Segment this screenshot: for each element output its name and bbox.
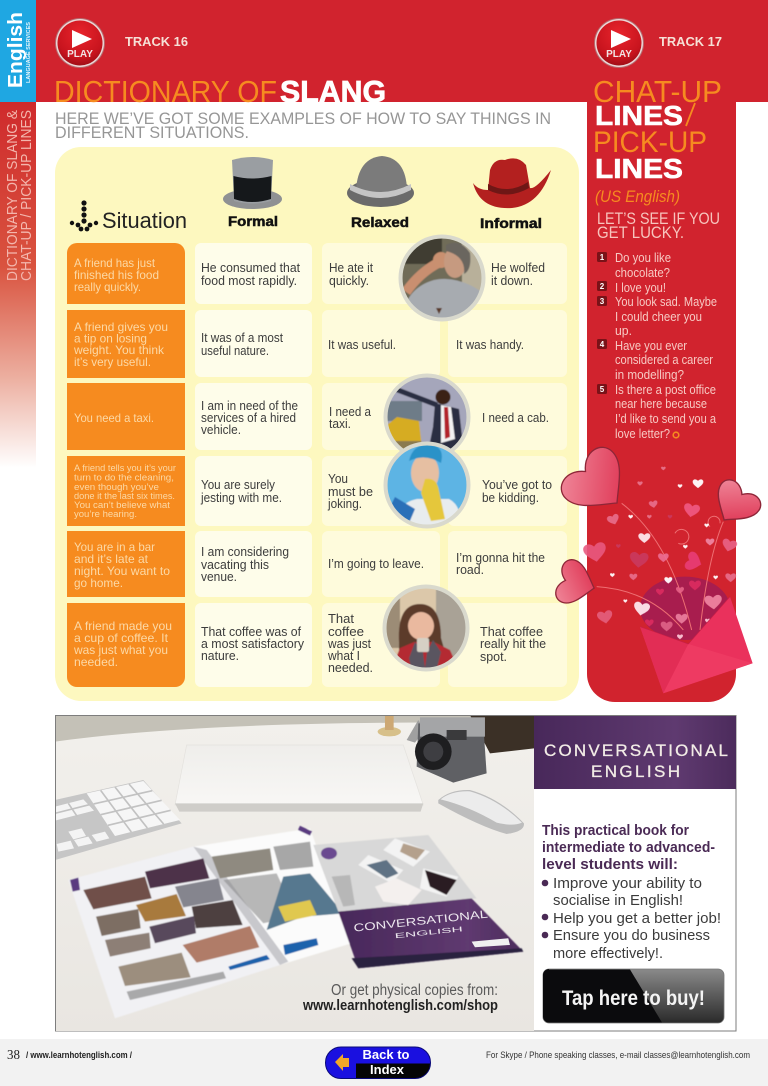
- row 3: [67, 383, 567, 450]
- row 4: A friend tells you it’s your: [74, 463, 176, 473]
- list: pick-up lines: I’d like to send you a: [615, 411, 717, 426]
- row 6: That: [328, 611, 354, 626]
- caption: physical copies: Or get physical copies from:: [331, 982, 498, 999]
- intro text: GET LUCKY.: [597, 223, 684, 242]
- row 6: needed.: [328, 660, 373, 675]
- logo tab: LANGUAGE SERVICES: [26, 21, 32, 83]
- logo tab: [0, 0, 36, 102]
- row 1: quickly.: [329, 273, 369, 288]
- list: pick-up lines: chocolate?: [615, 265, 670, 280]
- row 5: go home.: [74, 576, 123, 590]
- button: tap here to buy: Tap here to buy!: [562, 987, 705, 1010]
- row 6: That coffee: [480, 624, 543, 639]
- row 3: vehicle.: [201, 422, 241, 437]
- list: pick-up lines: near here because: [615, 396, 707, 411]
- row 6: a most satisfactory: [201, 636, 304, 651]
- row 5: You are in a bar: [74, 540, 155, 554]
- row 5: venue.: [201, 569, 237, 584]
- row 1: it down.: [491, 273, 533, 288]
- list: pick-up lines: 3: [600, 297, 605, 306]
- photo: desk with magazine: ENGLISH: [394, 926, 463, 940]
- row 4: You’ve got to: [482, 477, 552, 492]
- logo tab: English: [5, 12, 27, 88]
- row 4: You are surely: [201, 477, 275, 492]
- icon: situation dots: [70, 200, 98, 231]
- photo: desk with magazine: CONVERSATIONAL: [353, 909, 489, 935]
- row 5: vacating this: [201, 557, 269, 572]
- intro text: [597, 209, 720, 242]
- icon: big heart left: [555, 441, 640, 526]
- list: pick-up lines: You look sad. Maybe: [615, 294, 717, 309]
- photo: man wiping nose: [398, 234, 486, 322]
- subheading: US English: (US English): [595, 187, 680, 206]
- list: pick-up lines: 2: [600, 282, 605, 291]
- button: back to index: Back to: [363, 1047, 410, 1062]
- photo: cleaner in blue cap: [384, 442, 470, 528]
- row 5: I’m gonna hit the: [456, 550, 545, 565]
- row 6: a cup of coffee. It: [74, 631, 169, 645]
- row 5: road.: [456, 562, 484, 577]
- footer url: / www.learnhotenglish.com /: [26, 1050, 132, 1061]
- row 5: I’m going to leave.: [328, 556, 424, 571]
- list: pick-up lines: Do you like: [615, 250, 671, 265]
- book description: Improve your ability to: [553, 875, 702, 892]
- intro text: LET’S SEE IF YOU: [597, 209, 720, 228]
- row 4: be kidding.: [482, 490, 539, 505]
- icon: top hat: [223, 157, 282, 209]
- book description: level students will:: [542, 857, 678, 873]
- row 6: was just: [327, 636, 371, 651]
- row 1: food most rapidly.: [201, 273, 297, 288]
- row 3: You need a taxi.: [74, 411, 154, 425]
- row 2: useful nature.: [201, 343, 269, 358]
- list: pick-up lines: [597, 250, 717, 441]
- book description: Help you get a better job!: [553, 910, 721, 927]
- list: pick-up lines: in modelling?: [615, 367, 684, 382]
- heading: chat-up lines: CHAT-UP: [593, 74, 722, 109]
- footer: [0, 1039, 768, 1086]
- book description: [542, 823, 721, 962]
- row 4: [67, 456, 567, 526]
- list: pick-up lines: up.: [615, 323, 632, 338]
- icon: cowboy hat: [473, 158, 551, 208]
- icon: big heart lower left: [554, 558, 600, 609]
- heading: chat-up lines: LINES: [595, 153, 683, 184]
- book description: Ensure you do business: [553, 927, 710, 944]
- heading: relaxed: Relaxed: [351, 214, 409, 230]
- button: tap here to buy: [543, 969, 724, 1023]
- row 4: You can’t believe what: [74, 500, 171, 510]
- row 6: spot.: [480, 649, 507, 664]
- title: DICTIONARY OF: [54, 74, 277, 109]
- row 2: It was handy.: [456, 337, 524, 352]
- row 4: jesting with me.: [200, 490, 282, 505]
- row 5: night. You want to: [74, 564, 170, 578]
- row 1: He consumed that: [201, 260, 300, 275]
- play button: track 16: PLAY: [67, 49, 93, 60]
- panel: chat-up lines: [554, 74, 765, 702]
- row 2: a tip on losing: [74, 332, 147, 346]
- title: SLANG: [280, 74, 386, 109]
- row 6: really hit the: [480, 636, 546, 651]
- heading: chat-up lines: LINES: [595, 100, 683, 131]
- row 4: even though you’ve: [74, 482, 159, 492]
- track 16 label: TRACK 16: [125, 34, 188, 49]
- banner: conversational english: ENGLISH: [591, 762, 680, 781]
- row 6: [67, 603, 567, 687]
- banner: conversational english: [534, 716, 736, 789]
- list: pick-up lines: considered a career: [615, 352, 714, 367]
- row 4: you’re hearing.: [74, 509, 137, 519]
- row 2: it’s very useful.: [74, 355, 151, 369]
- page number: 38: [7, 1048, 20, 1063]
- list: pick-up lines: I could cheer you: [615, 309, 702, 324]
- row 4: You: [328, 471, 348, 486]
- list: pick-up lines: I love you!: [615, 280, 666, 295]
- photo: man hailing taxi: [384, 374, 470, 451]
- row 1: [67, 243, 567, 304]
- row 5: I am considering: [201, 544, 289, 559]
- banner: conversational english: CONVERSATIONAL: [544, 741, 728, 760]
- illustration: envelope with hearts: [582, 467, 753, 693]
- row 1: really quickly.: [74, 280, 141, 294]
- row 3: services of a hired: [201, 410, 296, 425]
- side tab: CHAT-UP / PICK-UP LINES: [18, 110, 35, 281]
- side tab: [0, 102, 36, 468]
- row 6: That coffee was of: [201, 624, 301, 639]
- list: pick-up lines: 4: [600, 340, 605, 349]
- row 6: A friend made you: [74, 619, 172, 633]
- row 3: I need a: [329, 404, 372, 419]
- caption: physical copies: www.learnhotenglish.com/shop: [302, 997, 498, 1014]
- heading: formal: Formal: [228, 213, 278, 229]
- track 17 label: TRACK 17: [659, 34, 722, 49]
- row 2: A friend gives you: [74, 320, 168, 334]
- heading: chat-up lines: PICK-UP: [593, 126, 707, 159]
- row 6: nature.: [201, 648, 239, 663]
- photo: desk with magazine: [55, 715, 535, 1032]
- row 2: weight. You think: [73, 343, 165, 357]
- row 3: I am in need of the: [201, 398, 298, 413]
- panel: book advert: [55, 715, 736, 1032]
- subtitle: HERE WE’VE GOT SOME EXAMPLES OF HOW TO SAY THINGS IN: [55, 109, 551, 128]
- heading: situation: Situation: [102, 208, 187, 233]
- row 6: was just what you: [73, 643, 168, 657]
- row 6: what I: [327, 648, 360, 663]
- play button: track 17: [594, 18, 644, 68]
- list: pick-up lines: 1: [600, 253, 605, 262]
- caption: physical copies: [302, 982, 498, 1014]
- row 6: needed.: [74, 655, 118, 669]
- photo: woman with coffee: [382, 584, 470, 672]
- book description: more effectively!.: [553, 945, 663, 962]
- row 1: He ate it: [329, 260, 373, 275]
- play button: track 17: PLAY: [606, 49, 632, 60]
- list: pick-up lines: Have you ever: [615, 338, 688, 353]
- book description: intermediate to advanced-: [542, 840, 715, 856]
- row 6: coffee: [328, 624, 364, 639]
- panel: slang table: [55, 147, 579, 701]
- list: pick-up lines: love letter?: [615, 426, 670, 441]
- book description: socialise in English!: [553, 892, 683, 909]
- play button: track 16: [55, 18, 105, 68]
- row 4: joking.: [327, 496, 362, 511]
- row 4: turn to do the cleaning,: [74, 472, 174, 482]
- list: pick-up lines: Is there a post office: [615, 382, 716, 397]
- icon: fedora: [347, 156, 414, 207]
- side tab: DICTIONARY OF SLANG &: [4, 110, 21, 281]
- row 2: [67, 310, 567, 378]
- heading: chat-up lines: [593, 74, 722, 184]
- book description: This practical book for: [542, 823, 689, 839]
- top red banner: [36, 0, 768, 102]
- row 2: It was useful.: [328, 337, 396, 352]
- row 5: and it’s late at: [74, 552, 149, 566]
- row 3: taxi.: [329, 416, 351, 431]
- subtitle: DIFFERENT SITUATIONS.: [55, 123, 249, 142]
- row 1: He wolfed: [491, 260, 545, 275]
- row 2: It was of a most: [201, 330, 283, 345]
- button: back to index: [326, 1047, 430, 1078]
- heading: informal: Informal: [480, 215, 542, 231]
- list: pick-up lines: 5: [600, 385, 605, 394]
- row 5: [67, 531, 567, 597]
- row 1: finished his food: [74, 268, 159, 282]
- row 1: A friend has just: [74, 256, 156, 270]
- row 4: done it the last six times.: [74, 491, 175, 501]
- row 4: must be: [328, 484, 373, 499]
- subtitle: [55, 109, 551, 142]
- row 3: I need a cab.: [482, 410, 549, 425]
- button: back to index: Index: [370, 1062, 405, 1077]
- icon: big heart right: [705, 476, 765, 533]
